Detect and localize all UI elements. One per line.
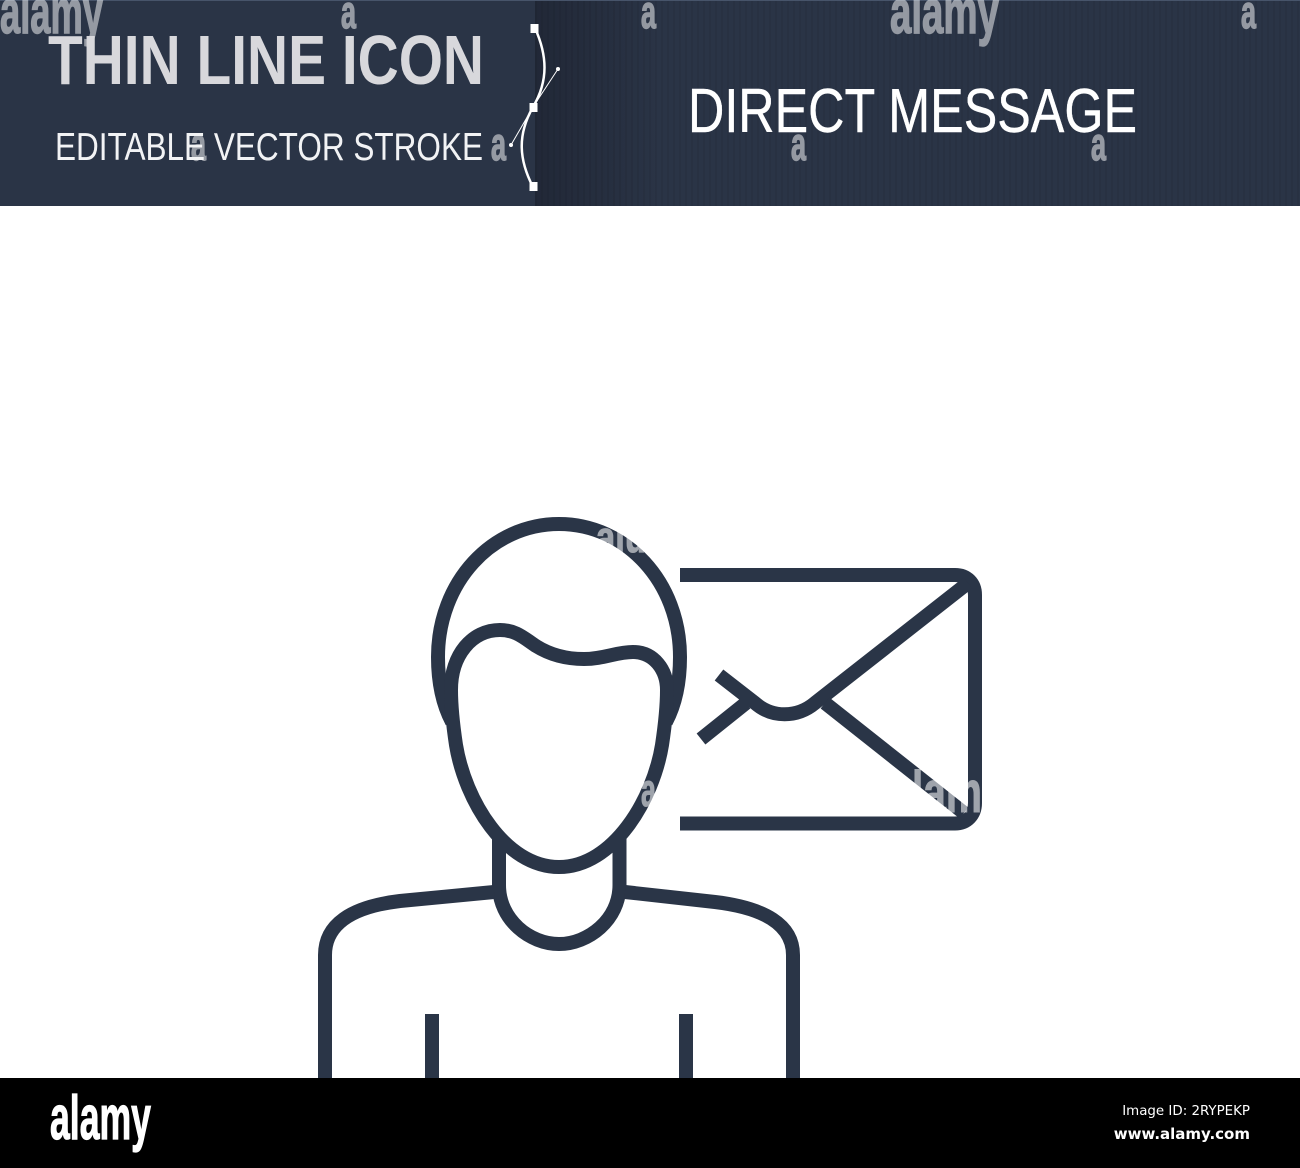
icon: right shoulder [625, 892, 793, 1078]
footer image id: Image ID: 2RYPEKP [1122, 1104, 1250, 1119]
watermarks in header: a [491, 118, 506, 170]
header banner [0, 0, 1300, 206]
watermarks over icon [596, 513, 982, 825]
icon: person with envelope [325, 524, 975, 1078]
icon: envelope flap [719, 583, 968, 714]
icon: left sleeve line [425, 1014, 439, 1078]
footer bar [0, 1078, 1300, 1168]
icon: neck [499, 838, 620, 944]
watermarks over icon: a [641, 764, 656, 816]
watermarks over icon: lam [912, 760, 982, 825]
watermarks in header: a [791, 118, 806, 170]
icon: right sleeve line [679, 1014, 693, 1078]
icon: head outline [438, 524, 680, 722]
watermarks over icon: alu [596, 513, 646, 562]
footer website: www.alamy.com [1114, 1125, 1250, 1143]
watermarks in header [0, 0, 1256, 170]
subheading: editable vector stroke: EDITABLE VECTOR STROKE [55, 126, 483, 169]
icon: face and hair line [451, 630, 667, 867]
icon: bezier curve handles [509, 24, 560, 191]
heading: direct message: DIRECT MESSAGE [688, 77, 1137, 146]
watermarks in header: a [1091, 118, 1106, 170]
icon: envelope right fold [825, 703, 964, 813]
icon: envelope outline [680, 575, 975, 824]
footer logo: alamy [50, 1084, 151, 1153]
icon: left shoulder [325, 892, 494, 1078]
watermarks in header: a [191, 118, 206, 170]
icon: envelope left fold [701, 703, 746, 739]
heading: thin line icon: THIN LINE ICON [48, 21, 484, 99]
